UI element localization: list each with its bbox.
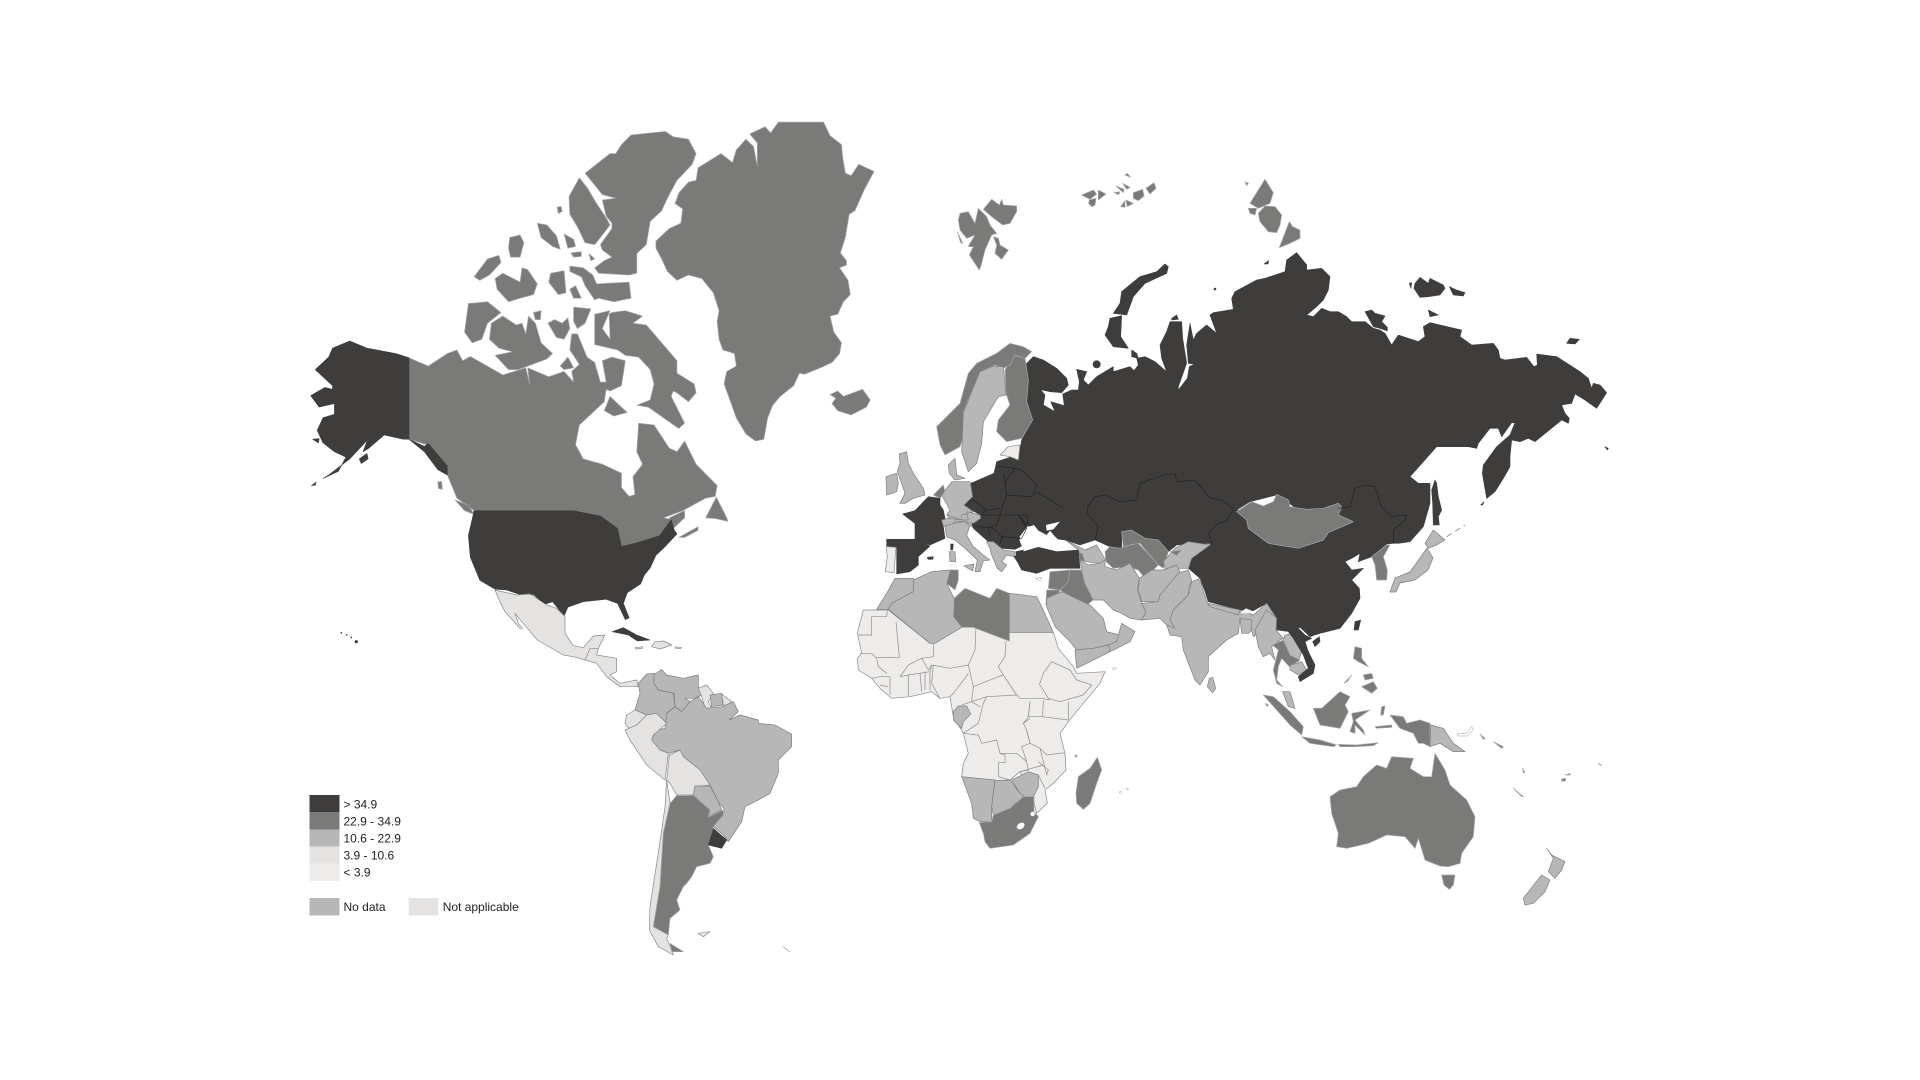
Japan (Hokkaido) bbox=[1425, 530, 1445, 548]
France and Belgium bbox=[903, 497, 945, 545]
legend swatch: no data bbox=[310, 898, 340, 916]
Sea of Azov bbox=[1046, 522, 1060, 531]
Canadian Arctic islands bbox=[465, 131, 696, 429]
Black Sea bbox=[1019, 525, 1070, 552]
Pacific islands bbox=[1457, 727, 1602, 797]
Alaska bbox=[311, 341, 447, 486]
Guyana bbox=[698, 685, 713, 708]
legend bbox=[310, 795, 519, 916]
Eastern Europe borders bbox=[963, 466, 1063, 543]
Iran bbox=[1080, 560, 1146, 620]
Greenland bbox=[656, 122, 874, 441]
Caribbean islands bbox=[635, 641, 682, 649]
Finland bbox=[997, 355, 1033, 442]
Mexico bbox=[495, 590, 605, 660]
legend swatch: 10.6 to 22.9 bbox=[310, 830, 340, 847]
Myanmar bbox=[1255, 610, 1283, 660]
Tunisia bbox=[947, 570, 958, 590]
Australia bbox=[1330, 753, 1475, 867]
Oman bbox=[1108, 623, 1135, 652]
Namibia bbox=[962, 777, 995, 822]
Switzerland and Austria bbox=[942, 512, 981, 527]
Portugal bbox=[885, 547, 896, 573]
Chile bbox=[649, 780, 673, 955]
India bbox=[1167, 578, 1277, 685]
Norway bbox=[937, 343, 1032, 455]
Malaysia peninsula bbox=[1283, 692, 1295, 708]
Yemen bbox=[1075, 645, 1110, 668]
region: Western and Central Europe bbox=[885, 445, 1080, 581]
Indian Ocean islets bbox=[1075, 668, 1128, 793]
Zimbabwe bbox=[1012, 772, 1038, 797]
Russia and Kazakhstan borders bbox=[1087, 474, 1234, 543]
Italian and Mediterranean islands bbox=[927, 544, 974, 571]
Germany bbox=[942, 482, 973, 520]
legend labels: Not applicable bbox=[443, 900, 519, 914]
Denmark bbox=[948, 458, 965, 480]
China bbox=[1188, 485, 1407, 637]
Bolivia bbox=[667, 750, 710, 795]
Caucasus bbox=[1067, 541, 1106, 563]
Saudi Arabia bbox=[1047, 592, 1120, 650]
legend labels: > 34.9 bbox=[344, 798, 378, 812]
region: Africa and Arabia bbox=[857, 570, 1135, 848]
legend swatch: not applicable bbox=[409, 898, 438, 916]
Bangladesh bbox=[1240, 618, 1252, 633]
Iraq bbox=[1060, 570, 1093, 605]
legend labels: 10.6 - 22.9 bbox=[344, 832, 401, 846]
Eastern Europe bbox=[964, 457, 1065, 549]
legend swatch: below 3.9 bbox=[310, 864, 340, 881]
Thailand bbox=[1272, 640, 1300, 687]
Italy bbox=[945, 522, 990, 572]
Russia bbox=[1013, 253, 1607, 552]
legend labels: No data bbox=[344, 900, 386, 914]
Turkey bbox=[1014, 547, 1080, 573]
legend labels: 3.9 - 10.6 bbox=[344, 848, 395, 862]
Uruguay bbox=[708, 828, 727, 848]
region: Nordics, Caucasus and Middle East bbox=[937, 343, 1146, 620]
Venezuela bbox=[654, 669, 702, 712]
Estonia bbox=[1000, 445, 1020, 460]
Botswana bbox=[992, 780, 1025, 815]
Cyprus bbox=[1036, 577, 1042, 581]
United States bbox=[468, 511, 677, 620]
Ecuador bbox=[625, 710, 647, 730]
Madagascar bbox=[1076, 757, 1102, 809]
legend labels: < 3.9 bbox=[344, 866, 371, 880]
Jordan and Israel bbox=[1046, 590, 1060, 605]
Turkmenistan bbox=[1105, 543, 1158, 578]
Hawaii bbox=[341, 632, 358, 643]
Papua New Guinea bbox=[1430, 725, 1465, 752]
Central America bbox=[585, 648, 638, 687]
New Zealand bbox=[1523, 848, 1565, 905]
Severnaya Zemlya bbox=[1245, 179, 1300, 248]
region: North America and Greenland bbox=[311, 122, 874, 643]
Ireland bbox=[886, 473, 898, 495]
Mongolia bbox=[1237, 494, 1353, 548]
Taiwan and Hainan bbox=[1313, 620, 1361, 647]
Pakistan bbox=[1142, 570, 1192, 628]
Kyrgyzstan and Tajikistan bbox=[1163, 542, 1210, 568]
region: Svalbard and Arctic islands bbox=[957, 173, 1300, 270]
Cuba bbox=[612, 628, 650, 641]
Peru bbox=[625, 713, 668, 780]
legend swatch: 22.9 to 34.9 bbox=[310, 812, 340, 830]
Algeria bbox=[888, 570, 962, 643]
Central Europe underlay bbox=[947, 505, 981, 528]
Paraguay bbox=[693, 786, 722, 817]
Libya bbox=[953, 588, 1009, 641]
Philippines bbox=[1344, 647, 1377, 693]
Egypt bbox=[1009, 593, 1053, 632]
Uzbekistan bbox=[1122, 530, 1168, 568]
Falkland Islands and South Georgia bbox=[698, 932, 789, 952]
Spain bbox=[887, 539, 930, 574]
Suriname bbox=[710, 693, 723, 707]
Balkans bbox=[987, 542, 1015, 572]
Sweden bbox=[962, 366, 1006, 472]
Laos bbox=[1283, 633, 1302, 662]
Bhutan bbox=[1241, 608, 1252, 613]
Argentina bbox=[653, 795, 723, 935]
Colombia bbox=[635, 673, 675, 723]
Canada mainland bbox=[409, 334, 717, 546]
Morocco bbox=[877, 578, 913, 609]
Sri Lanka bbox=[1207, 677, 1216, 693]
South Africa bbox=[979, 797, 1038, 848]
Tierra del Fuego bbox=[670, 943, 683, 952]
Africa country borders bbox=[858, 610, 1092, 788]
French Guiana bbox=[722, 694, 732, 706]
region: Latin America bbox=[495, 590, 792, 955]
Iceland bbox=[830, 389, 870, 415]
Russia and China island fringe bbox=[1093, 261, 1608, 525]
legend swatch: 3.9 to 10.6 bbox=[310, 847, 340, 864]
Vietnam bbox=[1288, 628, 1315, 682]
Svalbard bbox=[957, 199, 1017, 270]
United Kingdom bbox=[897, 452, 925, 503]
Indonesia bbox=[1263, 692, 1430, 747]
Japan (Honshu and Kyushu) bbox=[1390, 548, 1433, 592]
Nepal bbox=[1208, 603, 1240, 615]
legend labels: 22.9 - 34.9 bbox=[344, 814, 401, 828]
region: Russia and Central Asia bbox=[1013, 253, 1608, 637]
Afghanistan bbox=[1138, 565, 1180, 602]
Gabon bbox=[953, 706, 971, 728]
Canadian east and west islands bbox=[438, 481, 728, 537]
Cambodia bbox=[1290, 662, 1307, 675]
Franz Josef Land bbox=[1082, 173, 1156, 207]
Tasmania bbox=[1442, 875, 1455, 889]
Syria bbox=[1048, 570, 1070, 590]
Netherlands bbox=[933, 485, 945, 498]
Sub-Saharan and Sahel Africa bbox=[857, 610, 1105, 813]
legend labels bbox=[344, 798, 519, 914]
Kuril islands bbox=[1447, 525, 1465, 537]
region: South Asia bbox=[1138, 542, 1283, 693]
legend swatch: above 34.9 bbox=[310, 795, 340, 812]
Brazil bbox=[652, 697, 792, 842]
Korea bbox=[1372, 545, 1390, 580]
region: Southeast Asia and Oceania bbox=[1263, 620, 1602, 905]
